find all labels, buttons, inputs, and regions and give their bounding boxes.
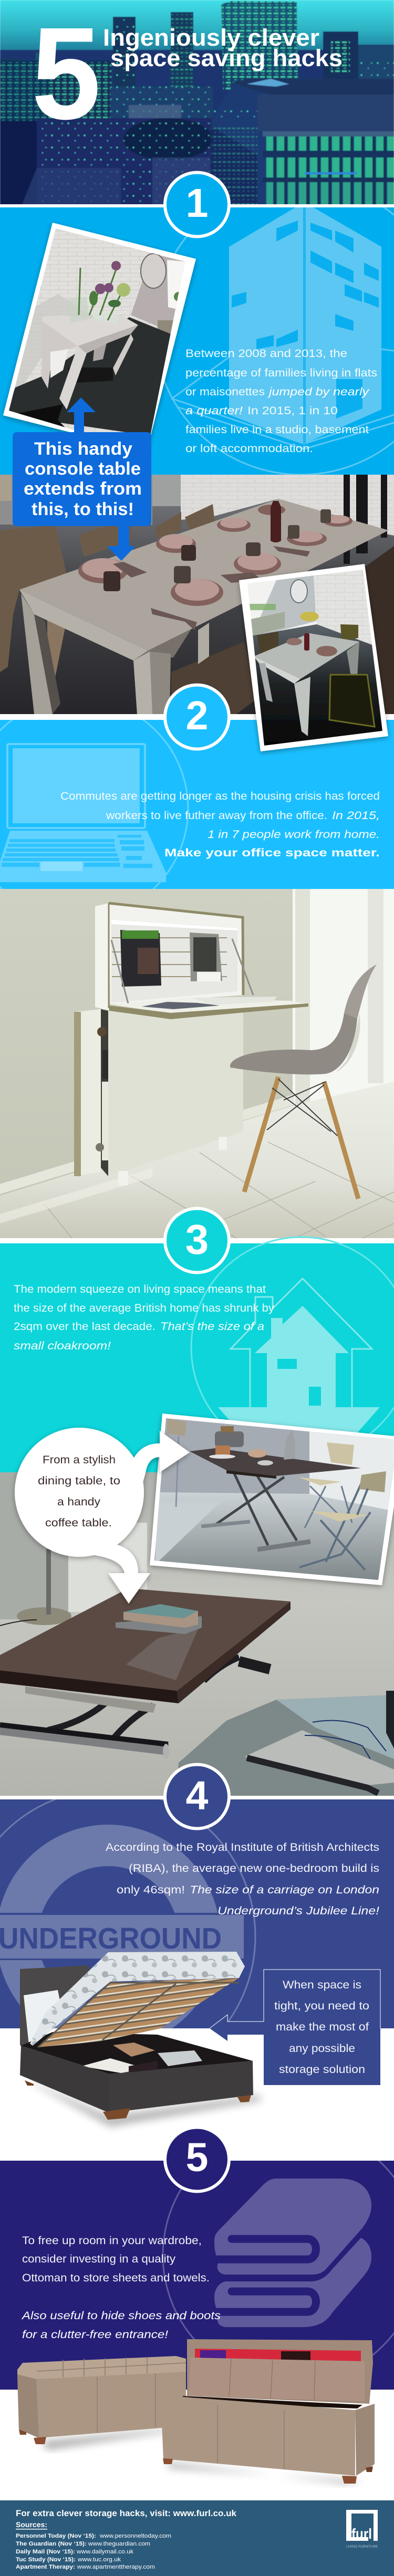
table top: [19, 499, 389, 651]
text: hack 1 statistic: In 2015, 1 in 10: [247, 405, 338, 417]
sources list: www.theguardian.com: [88, 2541, 150, 2547]
text: hack 2 statistic: workers to live futher away from the office.: [106, 810, 327, 822]
sources list: Sources:: [16, 2520, 47, 2529]
books: [116, 1604, 202, 1634]
text: hack 2 statistic: 1 in 7 people work from home.: [208, 829, 380, 841]
icon: underground roundel: UNDERGROUND: [0, 1922, 222, 1955]
title: 5 Ingeniously clever space saving hacks: space saving hacks: [110, 45, 343, 71]
badge: number 5: [165, 2128, 229, 2192]
text: hack 4 statistic: According to the Royal Institute of British Architects: [106, 1841, 379, 1854]
text: hack 5 tip: To free up room in your wardrobe,: [22, 2235, 202, 2247]
panel: hack 2: [0, 720, 394, 889]
badge: number 4: [165, 1764, 229, 1828]
text: hack 3 statistic: small cloakroom!: [14, 1340, 111, 1352]
chairs behind table: [167, 1419, 386, 1570]
icon: stacked towels: [162, 2161, 394, 2356]
vases and flowers: [68, 261, 183, 324]
badge: number 2: 2: [186, 693, 208, 738]
icon: house: [190, 1236, 394, 1434]
sources list: The Guardian (Nov ‘15):: [16, 2541, 87, 2547]
framed photo: console table closed: [1, 222, 198, 447]
title: 5 Ingeniously clever space saving hacks: 5: [32, 0, 101, 146]
callout text: [274, 1979, 369, 2076]
text: hack 2 statistic: Make your office space matter.: [164, 847, 380, 859]
callout: this handy console table: [13, 397, 151, 561]
text: speech bubble: a handy: [57, 1496, 101, 1508]
title: 5 Ingeniously clever space saving hacks: Ingeniously clever: [103, 24, 319, 51]
text: speech bubble: From a stylish: [43, 1454, 116, 1466]
text: hack 3 statistic: The modern squeeze on living space means that: [14, 1283, 266, 1295]
text: hack 2 statistic: [60, 790, 380, 859]
furl logo: furl: [351, 2526, 372, 2542]
text: hack 5 tip: Also useful to hide shoes and boots: [21, 2310, 221, 2322]
tile lines: [45, 1142, 394, 1238]
text: hack 1 statistic: or maisonettes: [185, 386, 265, 398]
arrow: up to console table: [67, 397, 96, 433]
text: hack 1 statistic: or loft accommodation.: [185, 443, 313, 455]
text: hack 1 statistic: families live in a studio, basement: [185, 424, 369, 436]
panel: hack 5: [0, 2161, 394, 2390]
badge: number 4: 4: [186, 1773, 209, 1818]
sources list: www.personneltoday.com: [99, 2533, 171, 2539]
sources list: Apartment Therapy:: [16, 2564, 75, 2570]
text: hack 1 statistic: percentage of families living in flats: [185, 367, 377, 379]
text: hack 5 tip: Ottoman to store sheets and towels.: [22, 2272, 210, 2284]
text: hack 5 tip: [21, 2235, 221, 2341]
callout text: console table: [25, 459, 141, 479]
speech bubble: [15, 1428, 144, 1557]
closed ottoman: [17, 2356, 186, 2444]
badge: number 5: 5: [186, 2135, 208, 2180]
photo: extended dining table: [0, 475, 394, 714]
text: hack 1 statistic: Between 2008 and 2013, the: [185, 348, 347, 360]
panel: hack 1: [0, 182, 394, 475]
furl logo: LIVING FURNITURE: [346, 2545, 378, 2549]
text: hack 3 statistic: [14, 1283, 275, 1352]
arrow: to coffee table: [95, 1544, 150, 1604]
sources list: www.tuc.org.uk: [77, 2557, 121, 2563]
text: hack 3 statistic: That’s the size of a: [160, 1321, 264, 1333]
text: speech bubble: coffee table.: [45, 1517, 112, 1529]
sources list: www.dailymail.co.uk: [76, 2549, 134, 2555]
sources list: [16, 2520, 171, 2570]
callout text: extends from: [24, 479, 142, 499]
coffee table top: [0, 1588, 291, 1691]
text: hack 2 statistic: In 2015,: [332, 810, 380, 822]
photo: ottoman benches: [17, 2339, 375, 2484]
callout text: this, to this!: [32, 499, 134, 519]
text: hack 2 statistic: Commutes are getting longer as the housing crisis has forced: [60, 790, 380, 802]
text: hack 1 statistic: a quarter!: [185, 405, 243, 417]
text: hack 3 statistic: the size of the average British home has shrunk by: [14, 1302, 275, 1314]
place settings: [78, 501, 352, 630]
footer call to action: For extra clever storage hacks, visit: www.furl.co.uk: [16, 2508, 237, 2518]
hero: London skyline photo: [0, 0, 394, 207]
sources list: Personnel Today (Nov ‘15):: [16, 2533, 96, 2539]
text: hack 1 statistic: jumped by nearly: [267, 386, 370, 398]
icon: apartment building: [164, 207, 394, 475]
breakfast items: [209, 1426, 295, 1465]
panel: hack 3: [0, 1237, 394, 1472]
text: hack 5 tip: for a clutter-free entrance!: [22, 2329, 168, 2341]
icon: underground roundel: [0, 1799, 256, 2028]
callout: speech bubble with arrows: [15, 1428, 190, 1604]
framed photo: table folded back: [239, 564, 389, 751]
badge: number 3: [165, 1209, 229, 1273]
text: hack 4 statistic: only 46sqm!: [117, 1884, 185, 1896]
callout text: any possible: [289, 2043, 355, 2055]
desk cabinet: [74, 903, 308, 1186]
badge: number 2: [165, 685, 229, 749]
framed photo: dining table raised: [147, 1412, 394, 1586]
callout text: storage solution: [279, 2064, 365, 2076]
text: hack 4 statistic: [106, 1841, 379, 1917]
floor lamp: [0, 1549, 71, 1626]
footer: [0, 2500, 394, 2576]
text: hack 4 statistic: Underground’s Jubilee Line!: [217, 1905, 379, 1917]
icon: laptop: [0, 720, 189, 889]
text: speech bubble: dining table, to: [38, 1475, 120, 1487]
text: hack 1 statistic: [185, 348, 377, 455]
sources list: www.apartmenttherapy.com: [77, 2564, 155, 2570]
callout text: This handy: [34, 439, 132, 459]
chairs around table: [0, 504, 257, 714]
text: hack 5 tip: consider investing in a quality: [22, 2253, 176, 2265]
arrow: down to dining table: [107, 525, 136, 561]
arrow: to dining table: [131, 1431, 190, 1502]
callout text: tight, you need to: [274, 2000, 369, 2012]
chrome legs: [201, 1470, 310, 1549]
photo: coffee table: [0, 1472, 394, 1796]
furl logo: [346, 2510, 378, 2549]
title: 5 Ingeniously clever space saving hacks: [32, 0, 343, 146]
callout text: When space is: [283, 1979, 361, 1991]
coffee table legs: [0, 1657, 270, 1758]
photo: fold-down wall desk: [0, 889, 394, 1238]
callout: storage solution box: [210, 1970, 380, 2085]
callout text: [24, 439, 142, 519]
text: hack 4 statistic: The size of a carriage on London: [190, 1884, 379, 1896]
sources list: Tuc Study (Nov ‘15):: [16, 2557, 76, 2563]
text: speech bubble: [38, 1454, 120, 1529]
badge: number 1: 1: [186, 181, 208, 226]
photo: ottoman storage bed: [20, 1952, 263, 2127]
open ottoman: [161, 2339, 375, 2484]
panel: hack 4: [0, 1799, 394, 2028]
moulded chair: [230, 965, 377, 1199]
callout text: make the most of: [276, 2021, 369, 2033]
cushion and newspaper: [176, 1691, 394, 1796]
callout box: [13, 432, 151, 526]
badge: number 3: 3: [185, 1216, 209, 1263]
sources list: Daily Mail (Nov ‘15):: [16, 2549, 75, 2555]
badge: number 1: [165, 172, 229, 236]
text: hack 3 statistic: 2sqm over the last decade.: [14, 1321, 155, 1333]
text: hack 4 statistic: (RIBA), the average new one-bedroom build is: [129, 1862, 379, 1875]
